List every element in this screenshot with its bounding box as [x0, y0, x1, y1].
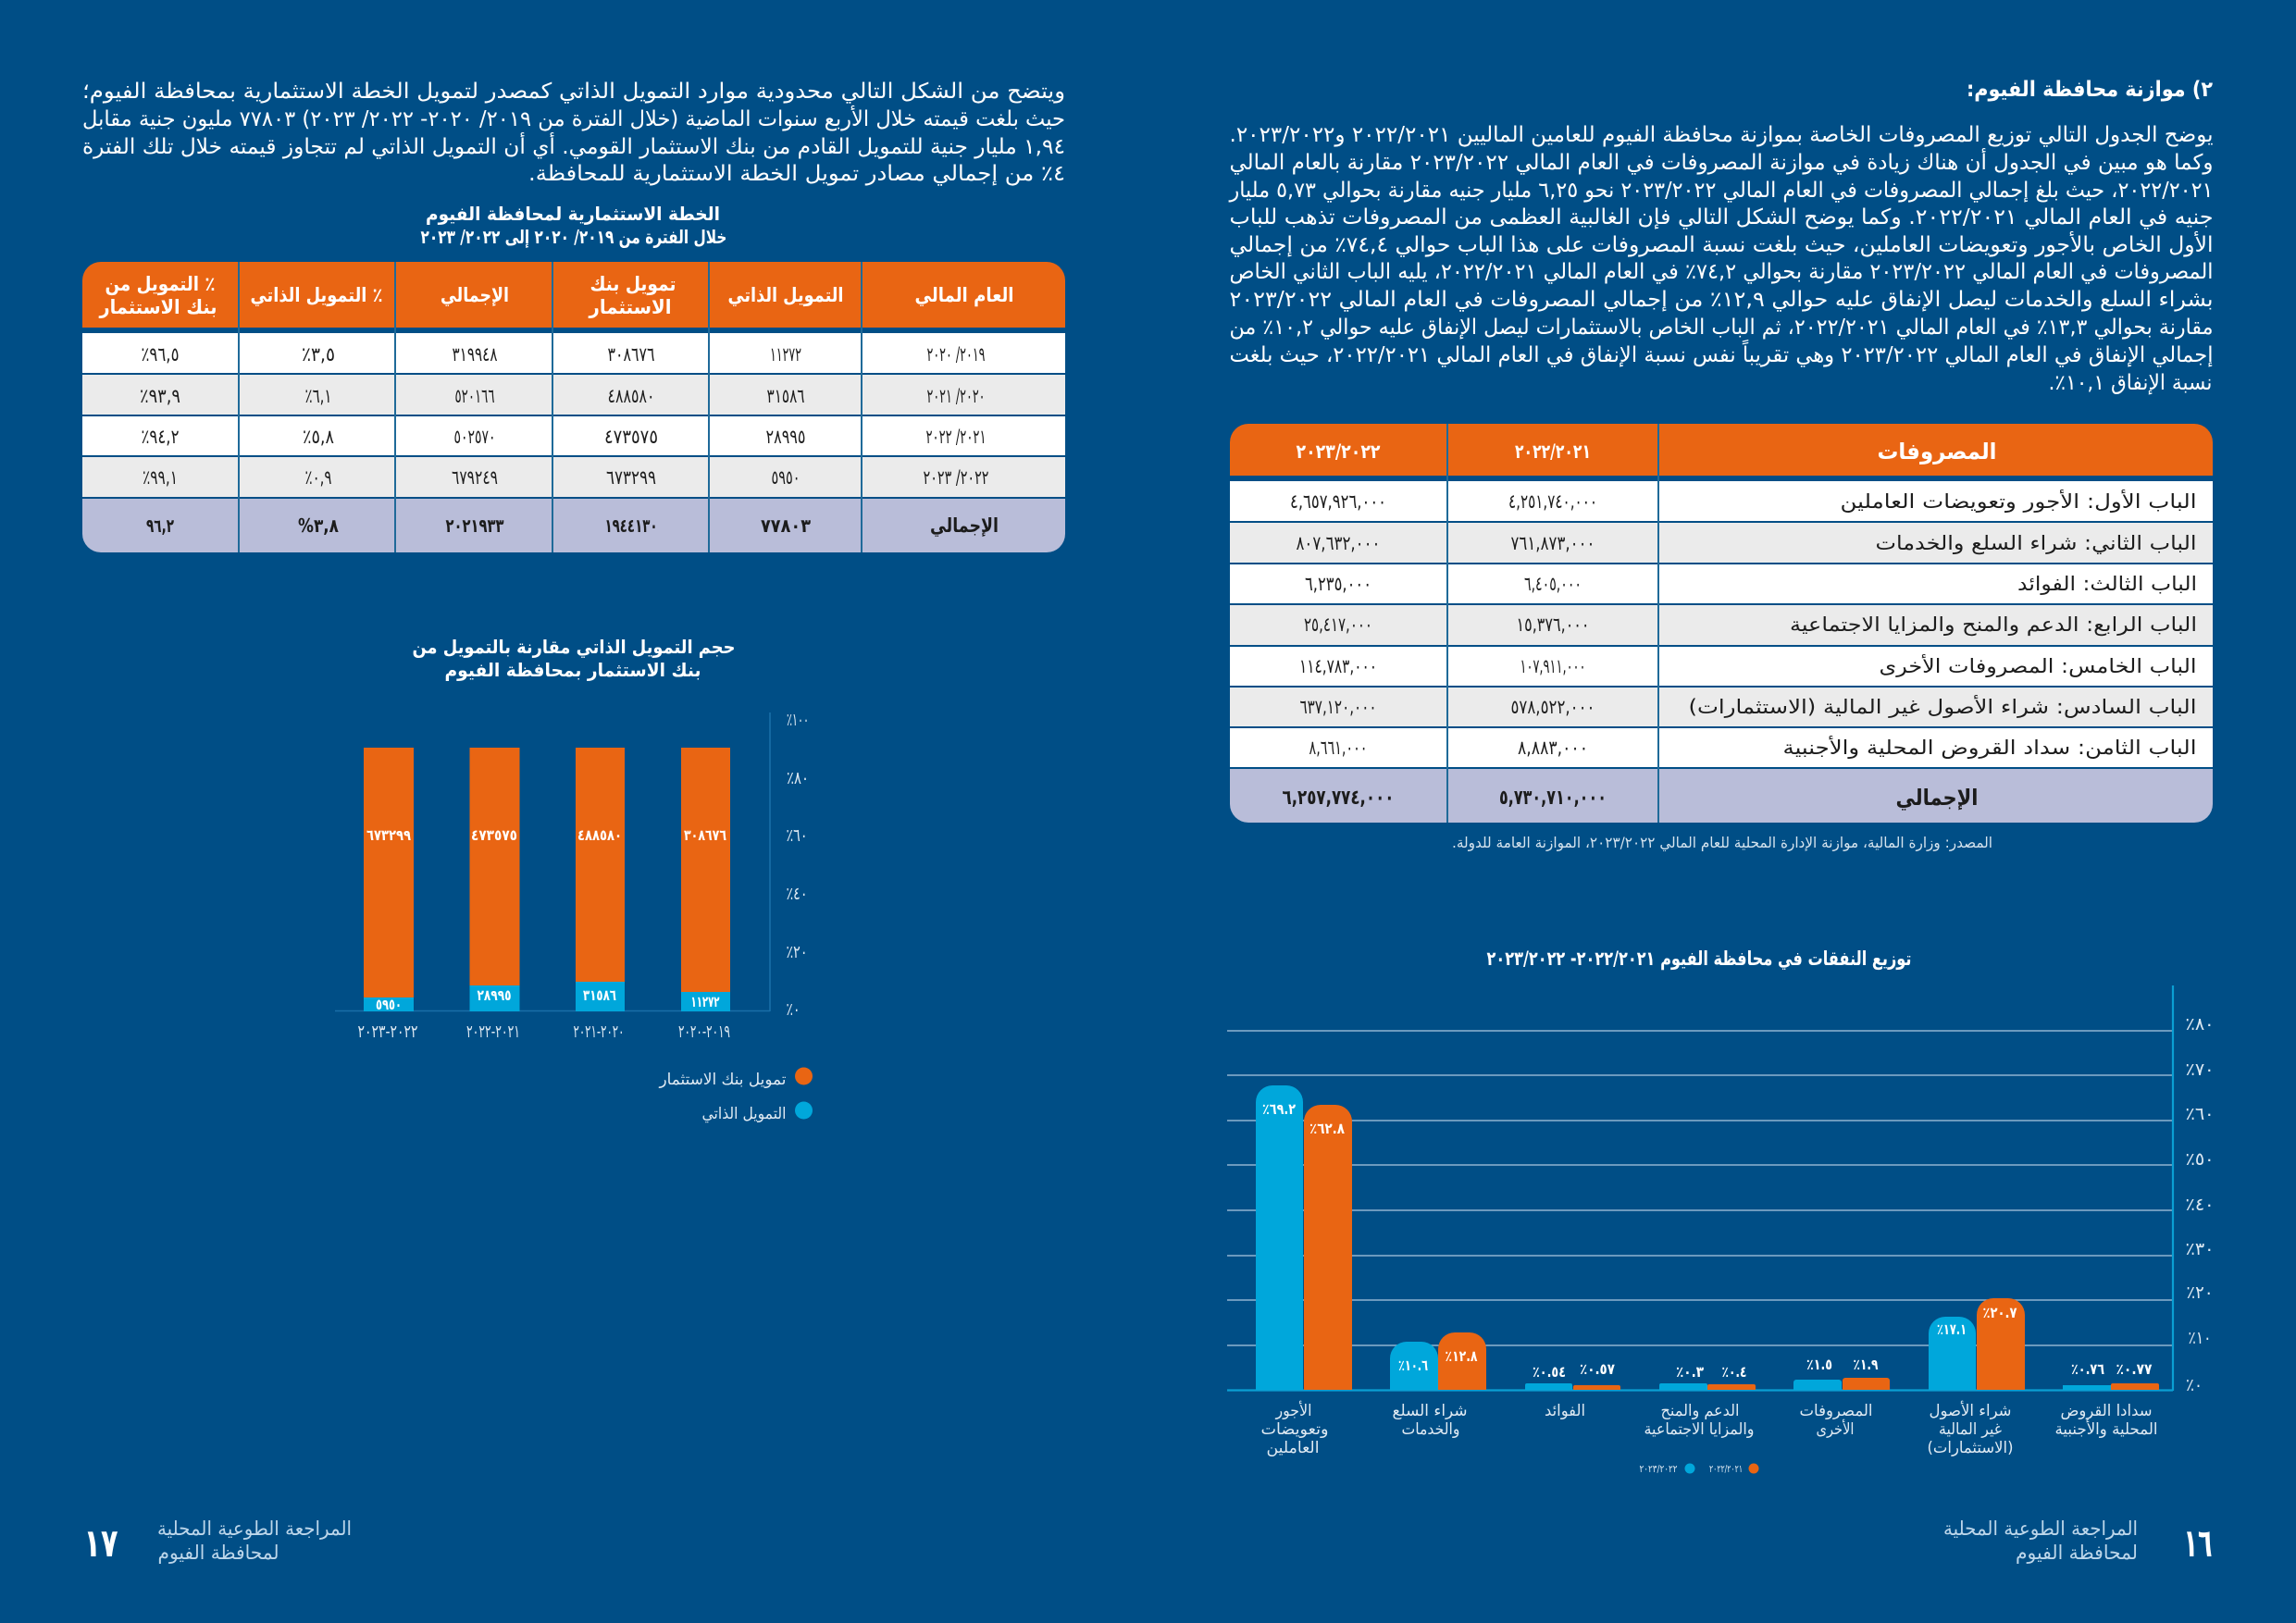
y axis labels: ١٠٪: [2188, 1328, 2212, 1348]
footer text: [1943, 1518, 2138, 1564]
y axis labels: [2186, 1014, 2214, 1395]
chart title: توزيع النفقات في محافظة الفيوم ٢٠٢٢/٢٠٢١- ٢٠٢٣/٢٠٢٢: [1486, 948, 1912, 970]
table body rows: ٧٦١,٨٧٣,٠٠٠: [1510, 532, 1595, 554]
page number 17: ١٧: [83, 1520, 118, 1566]
stacked bar 2022-2023: ٦٧٣٢٩٩: [366, 826, 411, 844]
table body rows: الباب الخامس: المصروفات الأخرى: [1879, 654, 2197, 677]
category labels: (الاستثمارات): [1927, 1439, 2014, 1457]
bars: interest: [1525, 1360, 1620, 1390]
legend: تمويل بنك الاستثمار: [659, 1071, 787, 1089]
bars: non-financial assets: ٢٠.٧٪: [1982, 1304, 2017, 1321]
footer text: المراجعة الطوعية المحلية: [157, 1518, 352, 1540]
chart title: بنك الاستثمار بمحافظة الفيوم: [444, 659, 701, 681]
table body rows: ٢٠٢٢/ ٢٠٢٣: [924, 466, 988, 489]
y axis labels: [787, 710, 809, 1020]
table body rows: ٨٠٧,٦٣٢,٠٠٠: [1296, 532, 1381, 554]
panel: self-financing stacked chart: [335, 636, 813, 1123]
table header row: بنك الاستثمار: [99, 296, 217, 318]
y axis labels: ٢٠٪: [2186, 1282, 2214, 1303]
table body rows: [82, 333, 1065, 497]
stacked bar 2021-2022: ٤٧٣٥٧٥: [471, 826, 517, 844]
category labels: شراء السلع: [1392, 1402, 1468, 1420]
y axis labels: ٦٠٪: [2186, 1104, 2214, 1124]
bars: goods and services: ١٠.٦٪: [1398, 1357, 1428, 1374]
table body rows: ٦٣٧,١٢٠,٠٠٠: [1299, 696, 1377, 718]
table total row: الإجمالي: [930, 514, 999, 537]
table total row: [1230, 769, 2213, 823]
bars: other expenses: [1793, 1356, 1890, 1390]
text block: left page paragraph: حيث بلغت قيمته خلال الأربع سنوات الماضية (خلال الفترة من ٢٠١٩/ ٢٠٢٠- ٢٠٢٢/ ٢٠٢٣) ٧٧٨٠٣ مليون جنية مقابل: [82, 105, 1065, 131]
category labels: المحلية والأجنبية: [2054, 1419, 2158, 1439]
bars: subsidies: ٠.٤٪: [1721, 1363, 1747, 1381]
table header row: التمويل الذاتي: [727, 284, 844, 306]
table body rows: ٤,٦٥٧,٩٢٦,٠٠٠: [1290, 490, 1386, 513]
chart title: حجم التمويل الذاتي مقارنة بالتمويل من: [413, 636, 735, 659]
category labels: والمزايا الاجتماعية: [1644, 1420, 1755, 1439]
y axis labels: ٠٪: [787, 999, 800, 1020]
x axis labels: ٢٠٢٢-٢٠٢٣: [357, 1022, 418, 1042]
table total row: ٧٧٨٠٣: [761, 514, 811, 537]
legend: التمويل الذاتي: [701, 1105, 787, 1123]
heading: investment plan table title: الخطة الاستثمارية لمحافظة الفيوم: [426, 203, 720, 225]
table body rows: ٢٠٢٠/ ٢٠٢١: [927, 385, 985, 407]
text block: budget paragraph: يوضح الجدول التالي توزيع المصروفات الخاصة بموازنة محافظة الفيوم للعامين الماليين ٢٠٢٢/٢٠٢١ و٢٠٢٣/٢٠٢٢.: [1229, 123, 2214, 147]
bars: wages: [1256, 1085, 1352, 1390]
legend: [659, 1068, 813, 1123]
y axis labels: ٣٠٪: [2186, 1239, 2214, 1259]
table body rows: ٥,٨٪: [303, 426, 334, 448]
table total row: ٣,٨%: [298, 514, 339, 537]
table body rows: ٥٧٨,٥٢٢,٠٠٠: [1510, 696, 1595, 718]
bars: interest: ٠.٥٤٪: [1533, 1363, 1566, 1381]
bars: other expenses: ١.٩٪: [1853, 1356, 1879, 1373]
category labels: الأخرى: [1816, 1419, 1855, 1439]
bars: subsidies: [1659, 1363, 1756, 1390]
table total row: ٢٠٢١٩٣٣: [446, 514, 503, 537]
table header row: ٢٠٢٢/٢٠٢١: [1515, 440, 1591, 463]
table body rows: ٩٦,٥٪: [141, 343, 180, 365]
category labels: سدادا القروض: [2060, 1402, 2153, 1420]
text block: budget paragraph: وكما هو مبين في الجدول أن هناك زيادة في موازنة المصروفات في العام المالي ٢٠٢٣/٢٠٢٢ مقارنة بالعام المالي: [1230, 148, 2214, 175]
table body rows: الباب السادس: شراء الأصول غير المالية (الاستثمارات): [1688, 695, 2197, 718]
table header row: ٢٠٢٣/٢٠٢٢: [1296, 440, 1381, 463]
stacked bar 2021-2022: ٢٨٩٩٥: [478, 986, 511, 1004]
table body rows: ٢٠١٩/ ٢٠٢٠: [927, 343, 985, 365]
text block: budget paragraph: بشراء السلع والخدمات ليصل الإنفاق عليه حوالي ١٢,٩٪ من إجمالي المصروفات في العام المالي ٢٠٢٣/٢٠٢٢: [1229, 288, 2214, 312]
table body rows: ٥٢٠١٦٦: [455, 385, 494, 407]
panel: right page section heading and paragraph: [1229, 78, 2214, 395]
table body rows: ٦,١٪: [305, 385, 331, 407]
chart title: [413, 636, 735, 681]
y axis labels: ٥٠٪: [2186, 1149, 2214, 1170]
bars: non-financial assets: ١٧.١٪: [1937, 1320, 1967, 1338]
table header row: تمويل بنك: [590, 273, 676, 295]
y axis labels: ٨٠٪: [2186, 1014, 2214, 1035]
table total row: [82, 499, 1065, 552]
footer text: المراجعة الطوعية المحلية: [1943, 1518, 2138, 1540]
table total row: ٥,٧٣٠,٧١٠,٠٠٠: [1499, 787, 1607, 810]
table body rows: [1230, 481, 2213, 767]
table header row: [1230, 424, 2213, 476]
table body rows: ٥٩٥٠: [772, 466, 800, 489]
text block: budget paragraph: مقارنة بحوالي ١٣,٣٪ في العام المالي ٢٠٢٢/٢٠٢١، ثم الباب الخاص بالاستثمارات ليصل الإنفاق عليه حوالي ١٠,٢٪ من: [1229, 316, 2214, 340]
y axis labels: ٧٠٪: [2186, 1059, 2214, 1080]
text block: left page paragraph: ٤٪ من إجمالي مصادر تمويل الخطة الاستثمارية للمحافظة.: [528, 162, 1065, 186]
bars: goods and services: [1390, 1332, 1486, 1390]
panel: expenditure distribution chart: [1227, 948, 2214, 1475]
table body rows: الباب الثالث: الفوائد: [2017, 573, 2197, 595]
x axis labels: ٢٠٢٠-٢٠٢١: [574, 1022, 624, 1042]
text block: left page paragraph: ١,٩٤ مليار جنية للتمويل القادم من بنك الاستثمار القومي. أي أن التمويل الذاتي لم تتجاوز قيمته خلال تلك الفترة: [82, 132, 1065, 159]
bars: goods and services: ١٢.٨٪: [1446, 1347, 1478, 1365]
y axis labels: ٦٠٪: [787, 825, 807, 846]
text block: budget paragraph: المصروفات في العام المالي ٢٠٢٣/٢٠٢٢ مقارنة بحوالي ٧٤,٢٪ في العام المالي ٢٠٢٢/٢٠٢١، يليه الباب الثاني الخاص: [1229, 260, 2214, 284]
table body rows: ٤٨٨٥٨٠: [607, 385, 655, 407]
text block: budget paragraph: ٢٠٢٢/٢٠٢١، حيث بلغ إجمالي المصروفات في العام المالي ٢٠٢٣/٢٠٢٢ نحو ٦,٢٥ مليار جنيه مقارنة بحوالي ٥,٧٣ مليار: [1229, 179, 2214, 203]
category labels: وتعويضات: [1260, 1420, 1329, 1439]
table body rows: ٠,٩٪: [305, 466, 331, 489]
stacked bar 2021-2022: [470, 748, 520, 1011]
text block: left page paragraph: [82, 80, 1065, 186]
category labels: [1260, 1401, 2158, 1457]
table body rows: ٣٠٨٦٧٦: [607, 343, 655, 365]
source note: المصدر: وزارة المالية، موازنة الإدارة المحلية للعام المالي ٢٠٢٣/٢٠٢٢، الموازنة العامة للدولة.: [1452, 834, 1992, 852]
table body rows: الباب الأول: الأجور وتعويضات العاملين: [1840, 489, 2197, 513]
table body rows: ٦,٢٣٥,٠٠٠: [1305, 573, 1371, 595]
y axis labels: ٢٠٪: [787, 942, 807, 962]
table body rows: ٩٩,١٪: [143, 466, 178, 489]
table body rows: ٢٥,٤١٧,٠٠٠: [1304, 613, 1372, 636]
heading: investment plan table title: [420, 203, 727, 248]
y axis labels: ٨٠٪: [787, 768, 809, 788]
footer text: لمحافظة الفيوم: [2016, 1542, 2138, 1564]
panel: expenditure table: [1230, 424, 2213, 823]
table header row: ٪ التمويل من: [105, 273, 215, 295]
category labels: الدعم والمنح: [1660, 1402, 1740, 1420]
table body rows: ٨,٦٦١,٠٠٠: [1309, 737, 1368, 759]
bars: other expenses: ١.٥٪: [1806, 1356, 1832, 1373]
footer: left page: [83, 1518, 352, 1566]
text block: budget paragraph: جنيه في العام المالي ٢٠٢٢/٢٠٢١. وكما يوضح الشكل التالي فإن الغالبية العظمى من المصروفات تذهب للباب: [1229, 205, 2214, 229]
table header row: الإجمالي: [441, 284, 509, 306]
table total row: ١٩٤٤١٣٠: [605, 514, 657, 537]
table body rows: ٢٠٢١/ ٢٠٢٢: [926, 426, 987, 448]
legend: ٢٠٢٢/٢٠٢١: [1709, 1463, 1743, 1475]
footer: right page: [1943, 1518, 2212, 1566]
bars: loan repayment: ٠.٧٧٪: [2116, 1360, 2153, 1378]
y axis labels: ٤٠٪: [2186, 1195, 2214, 1215]
legend: [1640, 1463, 1758, 1475]
x axis labels: [357, 1022, 730, 1042]
bars: wages: ٦٢.٨٪: [1309, 1120, 1345, 1137]
heading: Fayoum budget: ٢) موازنة محافظة الفيوم:: [1967, 78, 2213, 102]
table body rows: ٩٣,٩٪: [140, 385, 180, 407]
stacked bar 2019-2020: ٣٠٨٦٧٦: [684, 826, 726, 844]
x axis labels: ٢٠١٩-٢٠٢٠: [678, 1022, 730, 1042]
bars: non-financial assets: [1929, 1298, 2025, 1390]
text block: budget paragraph: [1229, 123, 2214, 395]
heading: investment plan table title: خلال الفترة من ٢٠١٩/ ٢٠٢٠ إلى ٢٠٢٢/ ٢٠٢٣: [420, 226, 727, 248]
category labels: غير المالية: [1939, 1420, 2002, 1439]
table header row: العام المالي: [914, 284, 1014, 306]
table header row: ٪ التمويل الذاتي: [250, 284, 383, 306]
table body rows: الباب الثاني: شراء السلع والخدمات: [1875, 532, 2197, 554]
table body rows: ٦,٤٠٥,٠٠٠: [1524, 573, 1582, 595]
x axis labels: ٢٠٢١-٢٠٢٢: [466, 1022, 520, 1042]
y axis labels: ١٠٠٪: [787, 710, 809, 730]
table total row: ٩٦,٢: [146, 514, 174, 537]
category labels: شراء الأصول: [1929, 1401, 2012, 1420]
bars: subsidies: ٠.٣٪: [1676, 1363, 1704, 1381]
table body rows: ٥٠٢٥٧٠: [453, 426, 496, 448]
stacked bar 2022-2023: ٥٩٥٠: [376, 996, 402, 1013]
text block: left page paragraph: ويتضح من الشكل التالي محدودية موارد التمويل الذاتي كمصدر لتمويل الخطة الاستثمارية بمحافظة الفيوم؛: [82, 80, 1065, 104]
bars: loan repayment: ٠.٧٦٪: [2071, 1360, 2104, 1378]
category labels: والخدمات: [1401, 1420, 1460, 1439]
table body rows: الباب الرابع: الدعم والمنح والمزايا الاجتماعية: [1790, 613, 2197, 637]
bars: interest: ٠.٥٧٪: [1580, 1360, 1615, 1378]
table body rows: ٨,٨٨٣,٠٠٠: [1518, 737, 1588, 759]
panel: investment plan table: [82, 262, 1065, 552]
stacked bar 2020-2021: ٣١٥٨٦: [583, 986, 616, 1004]
table body rows: ٣١٥٨٦: [766, 385, 805, 407]
table body rows: ١١٢٧٢: [770, 343, 801, 365]
stacked bar 2019-2020: [681, 748, 730, 1011]
table header row: المصروفات: [1877, 439, 1997, 465]
y axis labels: ٠٪: [2186, 1375, 2203, 1395]
footer text: لمحافظة الفيوم: [157, 1542, 279, 1564]
table total row: ٦,٢٥٧,٧٧٤,٠٠٠: [1283, 787, 1394, 810]
category labels: المصروفات: [1799, 1402, 1873, 1420]
bars: loan repayment: [2063, 1360, 2159, 1390]
table body rows: ١٠٧,٩١١,٠٠٠: [1520, 655, 1586, 677]
y axis labels: ٤٠٪: [787, 884, 807, 904]
category labels: العاملين: [1266, 1439, 1320, 1457]
table body rows: ١٥,٣٧٦,٠٠٠: [1516, 613, 1590, 636]
table body rows: ٦٧٩٢٤٩: [452, 466, 498, 489]
stacked bar 2019-2020: ١١٢٧٢: [690, 993, 720, 1010]
table header row: الاستثمار: [589, 296, 672, 318]
table header row: [82, 262, 1065, 328]
table body rows: ٣,٥٪: [302, 343, 335, 365]
page number 16: ١٦: [2184, 1520, 2212, 1566]
stacked bar 2020-2021: [576, 748, 625, 1011]
table body rows: ٤٧٣٥٧٥: [604, 426, 658, 448]
stacked bar 2022-2023: [364, 748, 414, 1013]
table body rows: ٦٧٣٢٩٩: [606, 466, 656, 489]
category labels: الفوائد: [1545, 1402, 1585, 1420]
legend: ٢٠٢٣/٢٠٢٢: [1640, 1463, 1678, 1475]
text block: budget paragraph: نسبة الإنفاق ١٠,١٪.: [2049, 371, 2212, 395]
table body rows: ٤,٢٥١,٧٤٠,٠٠٠: [1508, 490, 1597, 513]
table total row: الإجمالي: [1895, 785, 1979, 811]
table body rows: ١١٤,٧٨٣,٠٠٠: [1299, 655, 1377, 677]
stacked bar 2020-2021: ٤٨٨٥٨٠: [577, 826, 622, 844]
footer text: [157, 1518, 352, 1564]
table body rows: ٢٨٩٩٥: [766, 426, 805, 448]
text block: budget paragraph: إجمالي الإنفاق في العام المالي ٢٠٢٣/٢٠٢٢ وهي تقريباً نفس نسبة الإنفاق في العام المالي ٢٠٢٢/٢٠٢١، حيث بلغت: [1230, 340, 2214, 367]
category labels: الأجور: [1275, 1401, 1312, 1420]
table body rows: الباب الثامن: سداد القروض المحلية والأجنبية: [1782, 736, 2197, 759]
text block: budget paragraph: الأول الخاص بالأجور وتعويضات العاملين، حيث بلغت نسبة المصروفات على هذا الباب حوالي ٧٤,٤٪ من إجمالي: [1229, 231, 2214, 257]
bars: wages: ٦٩.٢٪: [1262, 1100, 1296, 1118]
table body rows: ٣١٩٩٤٨: [452, 343, 498, 365]
table body rows: ٩٤,٢٪: [141, 426, 180, 448]
